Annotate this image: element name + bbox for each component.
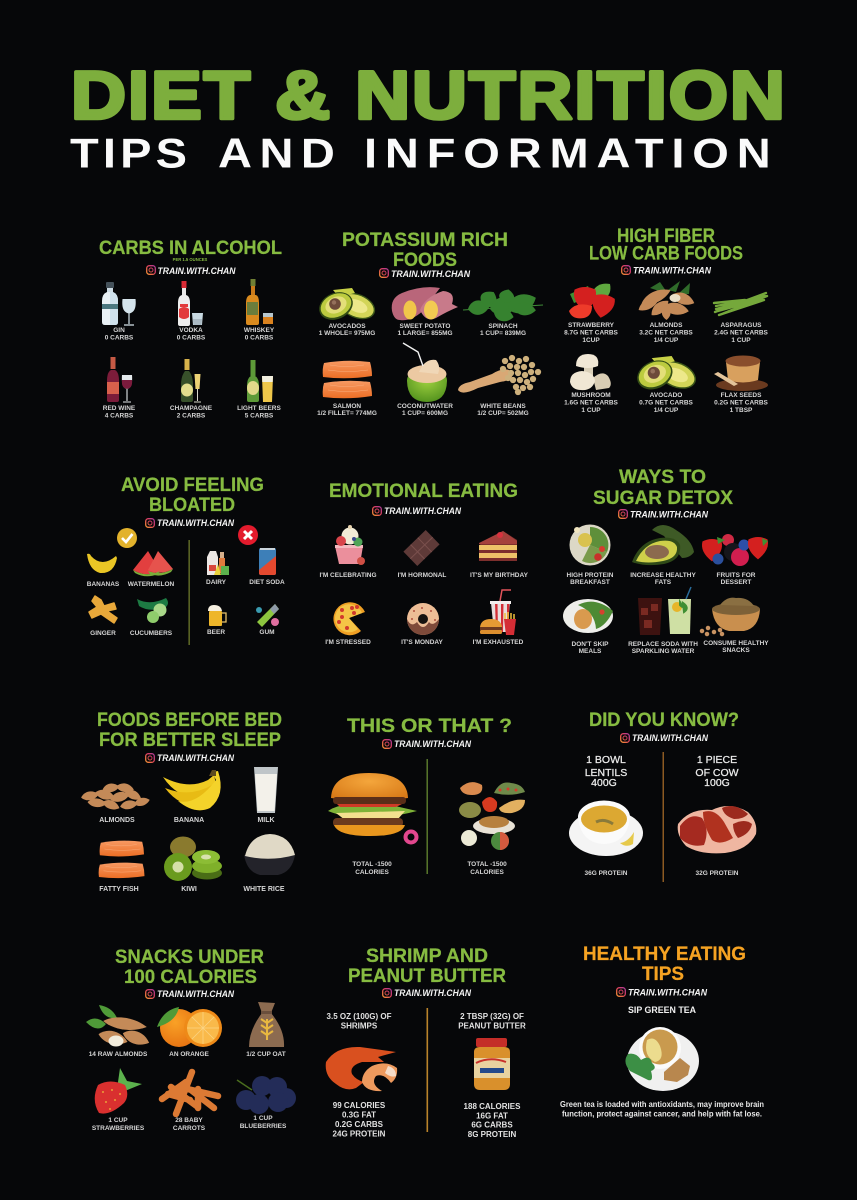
label: light beers: LIGHT BEERS [237,405,281,412]
text: green tea description [560,1100,764,1118]
label: protein breakfast: BREAKFAST [570,579,610,586]
icon: shrimp [326,1047,397,1091]
label: salmon: 1/2 FILLET= 774MG [317,410,377,417]
text: peanut butter stats: 16G FAT [476,1112,508,1120]
label: blueberries: 1 CUP [253,1115,273,1122]
label: 32g protein: 32G PROTEIN [696,870,739,877]
icon: strawberry [95,1068,142,1114]
label: raw almonds: 14 RAW ALMONDS [89,1051,148,1058]
label: asparagus: 2.4G NET CARBS [714,330,769,336]
label: avocado: 1/4 CUP [654,407,679,414]
handle: TRAIN.WITH.CHAN [391,268,470,279]
label: red wine: RED WINE [103,405,135,412]
heading: FOODS BEFORE BED [97,709,282,731]
icon: banana [163,770,221,810]
label: vodka: VODKA [179,327,203,334]
icon: baby carrots [162,1072,218,1114]
heading: SUGAR DETOX [593,487,733,509]
label: healthy snacks: SNACKS [722,647,750,654]
heading: HEALTHY EATING [583,943,746,965]
icon: oat sack [249,1002,284,1047]
label: beer: BEER [207,629,225,636]
heading: CARBS IN ALCOHOL [99,237,282,259]
text: peanut butter stats: 8G PROTEIN [468,1130,516,1139]
text: 1 bowl lentils: LENTILS [585,767,627,779]
divider [426,1008,428,1132]
label: white rice: WHITE RICE [243,886,285,893]
label: fruits: FRUITS FOR [716,572,756,579]
label: salmon: SALMON [333,403,361,410]
label: asparagus: ASPARAGUS [720,322,762,329]
heading [593,466,733,509]
heading [583,943,746,985]
label: almonds: ALMONDS [99,817,135,824]
label: gin: GIN [113,327,125,334]
heading [342,229,508,271]
panel: ways to sugar detox [563,466,769,655]
icon: almonds [80,782,151,812]
icon: soda and sparkling water [638,587,691,635]
text: peanut butter serving: 2 TBSP (32G) OF [460,1012,524,1021]
icon: fast food [480,590,516,635]
panel: potassium rich foods [315,229,543,417]
text: 1 bowl lentils: 400G [591,777,617,789]
label: total left: CALORIES [355,869,389,876]
label: hormonal: I'M HORMONAL [398,572,446,579]
handle: TRAIN.WITH.CHAN [384,505,461,516]
icon: avocado [633,355,700,395]
icon: plate with meal [563,599,613,633]
label: red wine: 4 CARBS [105,412,134,420]
label: avocado: 0.7G NET CARBS [639,400,694,406]
text: green tea description: function, protect against cancer, and help with fat lose. [562,1110,762,1118]
label: baby carrots: CARROTS [173,1125,206,1132]
icon: healthy foods collage [459,782,525,850]
text: shrimp stats: 0.2G CARBS [335,1120,384,1129]
label: strawberry: 1CUP [582,337,600,344]
panel: snacks under 100 calories [86,946,296,1132]
label: total right: CALORIES [470,869,504,876]
label: ginger: GINGER [90,630,116,637]
heading: LOW CARB FOODS [589,242,743,264]
icon: check badge [117,528,137,548]
panel: high fiber low carb foods [564,225,769,414]
label: almonds: 3.2C NET CARBS [639,330,693,336]
icon: kiwi [164,836,222,881]
label: avocados: AVOCADOS [328,323,366,330]
icon: salmon [323,361,372,398]
label: kiwi: KIWI [181,886,197,893]
label: champagne: 2 CARBS [177,412,206,420]
panel: avoid feeling bloated [87,474,285,645]
label: sweet potato: SWEET POTATO [400,323,450,330]
icon: fruits [702,534,768,566]
label: total right: TOTAL -1500 [467,861,507,868]
divider [426,759,428,874]
label: champagne: CHAMPAGNE [170,405,212,412]
label: mushroom: 1.6G NET CARBS [564,400,619,406]
label: oat: 1/2 CUP OAT [246,1051,286,1058]
label: strawberry: 8.7G NET CARBS [564,330,619,336]
icon: mushroom [570,354,611,390]
label: flax seeds: 0.2G NET CARBS [714,400,769,406]
icon: burger [328,773,417,836]
panel: emotional eating [319,480,529,646]
label: asparagus: 1 CUP [731,337,751,344]
label: stressed: I'M STRESSED [325,639,371,646]
heading: SNACKS UNDER [115,946,264,968]
label: mushroom: MUSHROOM [571,392,611,399]
heading [348,945,506,987]
label: coconut water: COCONUTWATER [397,403,453,410]
icon: whiskey [246,279,273,325]
icon: small donut [406,832,416,842]
icon: healthy snacks bowl [702,598,760,634]
label: celebrating: I'M CELEBRATING [319,572,377,579]
label: diet soda: DIET SODA [249,579,285,586]
icon: avocados [315,287,379,325]
text: 1 bowl lentils: 1 BOWL [586,754,626,766]
label: 36g protein: 36G PROTEIN [585,870,628,877]
icon: dairy [207,551,229,575]
label: healthy snacks: CONSUME HEALTHY [703,640,769,647]
text: shrimp serving: SHRIMPS [341,1022,378,1030]
text: shrimp stats: 0.3G FAT [342,1110,376,1120]
label: replace soda: SPARKLING WATER [632,648,695,655]
icon: white beans [458,358,538,393]
divider [188,540,190,645]
label: white beans: WHITE BEANS [480,403,526,410]
text: peanut butter serving: PEANUT BUTTER [458,1022,526,1030]
heading: AVOID FEELING [121,474,264,496]
heading: WAYS TO [619,466,706,488]
label: don't skip meals: MEALS [579,648,602,655]
label: spinach: 1 CUP= 839MG [480,330,526,337]
handle: TRAIN.WITH.CHAN [157,988,234,999]
icon: milk [254,767,278,813]
heading [97,709,282,751]
icon: green tea cup [625,1027,699,1091]
icon: peanut butter jar [474,1038,510,1090]
heading: THIS OR THAT ? [347,715,512,737]
icon: beer [208,605,226,626]
label: avocado: AVOCADO [650,392,682,399]
icon: chocolate [403,530,440,566]
text: shrimp serving: 3.5 OZ (100G) OF [327,1012,391,1021]
heading [115,946,264,988]
handle: TRAIN.WITH.CHAN [394,738,471,749]
heading [589,225,743,264]
subtitle: Tips and Information: INFORMATION [364,131,779,177]
icon: flax seeds [714,356,768,391]
heading: SHRIMP AND [366,945,488,967]
label: almonds: 1/4 CUP [654,337,679,344]
panel: carbs in alcohol [99,237,282,420]
panel: foods before bed [80,709,295,893]
label: orange: AN ORANGE [169,1051,210,1058]
handle: TRAIN.WITH.CHAN [157,517,234,528]
label: cucumbers: CUCUMBERS [130,630,173,637]
heading: HIGH FIBER [617,225,715,247]
heading: FOODS [393,249,457,271]
icon: coconut [403,343,447,402]
label: vodka: 0 CARBS [177,334,206,342]
label: monday: IT'S MONDAY [401,639,444,646]
label: watermelon: WATERMELON [128,581,175,588]
label: flax seeds: FLAX SEEDS [721,392,761,399]
text: shrimp stats: 99 CALORIES [333,1101,385,1110]
label: spinach: SPINACH [488,323,518,330]
icon: asparagus [714,293,767,315]
icon: bananas [87,554,117,573]
label: coconut water: 1 CUP= 600MG [402,410,448,417]
handle: TRAIN.WITH.CHAN [157,752,234,763]
icon: white rice [244,834,295,875]
text: peanut butter stats: 6G CARBS [471,1120,513,1130]
icon: almonds [636,281,696,320]
label: banana: BANANA [174,817,204,824]
icon: sweet potato [392,287,458,320]
icon: donut [407,603,439,635]
text: sip green tea: SIP GREEN TEA [628,1005,696,1016]
divider [662,752,664,882]
handle: TRAIN.WITH.CHAN [630,508,708,520]
label: light beers: 5 CARBS [245,412,274,420]
label: sweet potato: 1 LARGE= 855MG [397,330,453,337]
icon: blueberries [236,1076,296,1114]
handle: TRAIN.WITH.CHAN [632,732,708,743]
label: baby carrots: 28 BABY [175,1117,203,1124]
text: 1 piece of cow: OF COW [695,767,739,779]
subtitle: Tips and Information [70,131,779,177]
icon: vodka [178,281,203,326]
heading: DID YOU KNOW? [589,709,739,731]
heading: PEANUT BUTTER [348,965,506,987]
icon: protein breakfast bowl [570,524,610,566]
icon: diet soda [259,548,276,575]
handle: TRAIN.WITH.CHAN [394,987,471,998]
label: almonds: ALMONDS [650,322,682,329]
heading: TIPS [642,963,684,985]
icon: raw almonds [86,1005,151,1048]
panel: healthy eating tips [560,943,764,1118]
icon: watermelon [133,551,173,576]
panel: this or that [328,715,525,876]
handle: TRAIN.WITH.CHAN [633,264,711,276]
note: per 1.5 ounces: PER 1.5 OUNCES [173,257,208,262]
icon: fatty fish [99,841,144,878]
label: don't skip meals: DON'T SKIP [572,641,608,648]
subtitle: Tips and Information: AND [218,131,342,177]
label: whiskey: 0 CARBS [245,334,274,342]
label: strawberry: STRAWBERRY [568,322,614,329]
icon: red wine [107,357,132,402]
label: exhausted: I'M EXHAUSTED [473,639,524,646]
label: avocados: 1 WHOLE= 975MG [319,330,375,337]
panel: shrimp and peanut butter [326,945,526,1139]
icon: healthy fats avocado [632,525,694,565]
icon: ice cream [335,525,365,565]
label: gum: GUM [259,629,275,636]
text: green tea description: Green tea is loaded with antioxidants, may improve brain [560,1100,764,1109]
text: 1 piece of cow: 100G [704,777,730,789]
label: total left: TOTAL -1500 [352,861,392,868]
icon: cucumbers [137,598,168,623]
text: shrimp stats: 24G PROTEIN [333,1130,386,1138]
icon: champagne [181,359,201,402]
label: replace soda: REPLACE SODA WITH [628,641,698,648]
label: fruits: DESSERT [721,579,751,586]
icon: strawberry [569,284,616,320]
handle: TRAIN.WITH.CHAN [628,986,707,998]
label: healthy fats: INCREASE HEALTHY [630,572,696,579]
title: Diet & Nutrition: DIET & NUTRITION [71,58,787,134]
label: bananas: BANANAS [87,581,120,588]
label: white beans: 1/2 CUP= 502MG [477,410,529,417]
panel: did you know [569,709,756,882]
label: whiskey: WHISKEY [244,327,274,334]
heading: EMOTIONAL EATING [329,480,518,502]
label: strawberries: STRAWBERRIES [92,1125,145,1132]
text: 1 piece of cow: 1 PIECE [697,754,737,766]
icon: orange [157,1007,222,1047]
handle: TRAIN.WITH.CHAN [158,265,236,276]
icon: ginger [89,596,117,623]
label: protein breakfast: HIGH PROTEIN [567,572,613,579]
label: healthy fats: FATS [655,579,672,586]
label: fatty fish: FATTY FISH [99,886,139,893]
heading: POTASSIUM RICH [342,229,508,251]
icon: gum [256,604,279,627]
subtitle: Tips and Information: TIPS [70,131,191,177]
label: birthday: IT'S MY BIRTHDAY [470,572,529,579]
label: blueberries: BLUEBERRIES [240,1123,287,1130]
icon: lentil soup [569,800,643,856]
heading [121,474,264,516]
label: mushroom: 1 CUP [581,407,601,414]
label: milk: MILK [257,817,275,824]
icon: light beers [247,360,273,402]
icon: steak [678,806,756,853]
label: gin: 0 CARBS [105,334,134,342]
heading: 100 CALORIES [124,966,257,988]
label: strawberries: 1 CUP [108,1117,128,1124]
label: dairy: DAIRY [206,579,227,586]
icon: pizza [333,602,365,635]
heading: FOR BETTER SLEEP [99,729,281,751]
text: peanut butter stats: 188 CALORIES [464,1102,520,1111]
icon: cross badge [238,525,258,545]
icon: gin [102,282,136,325]
label: flax seeds: 1 TBSP [730,407,753,414]
icon: spinach [463,287,543,323]
heading: BLOATED [149,494,235,516]
icon: birthday cake [479,531,517,561]
